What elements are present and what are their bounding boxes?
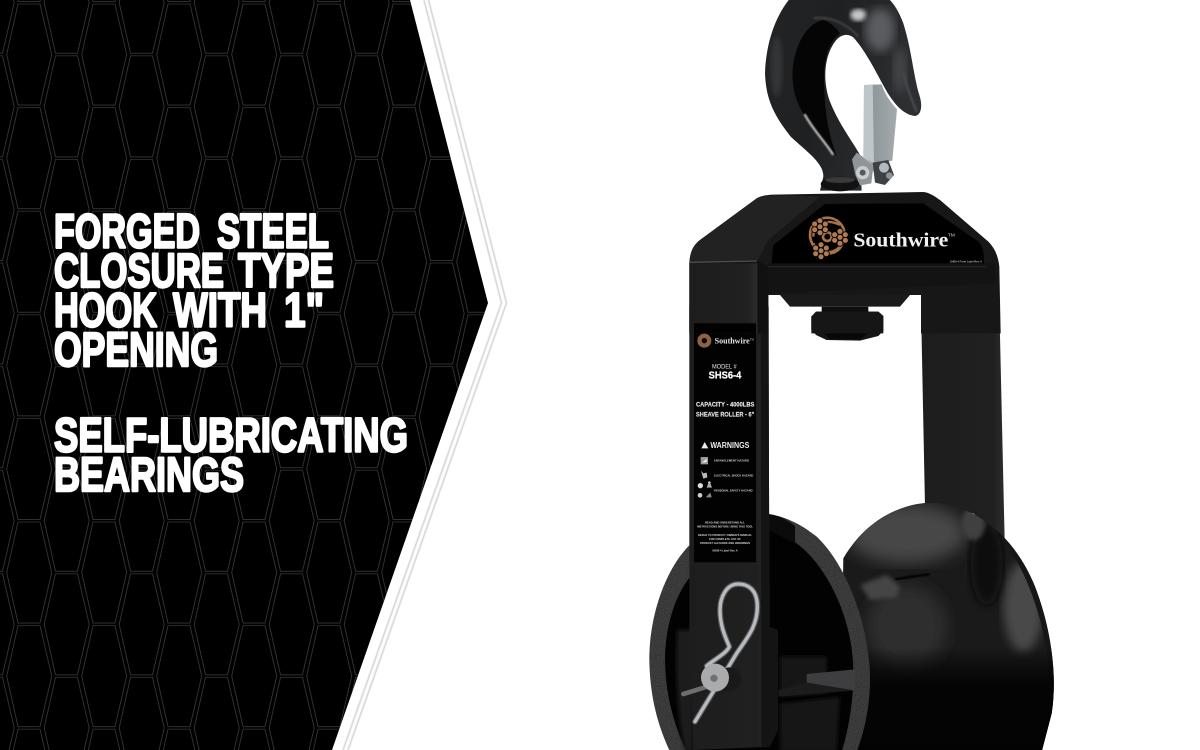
safety latch bbox=[863, 84, 897, 172]
label warnings: ENTANGLEMENT HAZARD bbox=[714, 459, 749, 463]
heading: product features: 1" bbox=[284, 284, 324, 338]
heading: product features: OPENING bbox=[54, 324, 218, 377]
copper logo bbox=[810, 218, 848, 260]
label logo: Southwire bbox=[715, 336, 750, 345]
yoke brand label bbox=[772, 203, 984, 263]
right flange and spool bbox=[837, 497, 1063, 750]
chevron outline stripes bbox=[343, 0, 506, 750]
heading: product features: BEARINGS bbox=[54, 449, 244, 502]
label instructions: REFER TO PRODUCT OWNER'S MANUAL bbox=[698, 533, 752, 537]
yoke brand label: TM bbox=[948, 233, 955, 238]
label warnings bbox=[698, 441, 753, 498]
heading: product features: CLOSURE bbox=[54, 245, 224, 298]
label specs: SHEAVE ROLLER - 6" bbox=[696, 413, 754, 419]
hook bbox=[765, 0, 921, 191]
left flange bbox=[649, 514, 870, 750]
yoke brand label: SHS6-4 Front Label Rev. A bbox=[950, 259, 983, 263]
front strap bbox=[689, 307, 770, 750]
label warnings: ELECTRICAL SHOCK HAZARD bbox=[714, 473, 753, 477]
label instructions: FOR COMPLETE LIST OF bbox=[709, 537, 741, 541]
panel: black chevron background bbox=[0, 0, 488, 750]
heading: product features bbox=[54, 206, 408, 502]
label model: SHS6-4 bbox=[709, 371, 742, 382]
hook and yoke bbox=[689, 0, 1001, 333]
heading: product features: FORGED bbox=[54, 206, 200, 258]
label warnings: WARNINGS bbox=[710, 441, 750, 450]
heading: product features: STEEL bbox=[217, 206, 329, 258]
label logo bbox=[697, 334, 754, 348]
label instructions: INSTRUCTIONS BEFORE USING THIS TOOL bbox=[697, 524, 753, 528]
label warnings: PERSONAL SAFETY HAZARD bbox=[714, 488, 753, 492]
side label bbox=[694, 323, 756, 562]
heading: product features: HOOK bbox=[54, 284, 157, 338]
label model bbox=[709, 364, 742, 382]
label specs bbox=[696, 403, 754, 419]
latch hardware bbox=[852, 153, 894, 185]
nut bbox=[811, 312, 883, 341]
heading: product features: TYPE bbox=[238, 245, 334, 298]
side label top edge bbox=[694, 323, 756, 333]
cross bar bbox=[807, 669, 855, 691]
label model: MODEL # bbox=[712, 364, 737, 370]
yoke bracket under plate bbox=[780, 295, 910, 333]
label logo: TM bbox=[750, 337, 754, 341]
label instructions bbox=[697, 520, 753, 553]
product photo: sheave roller with hook bbox=[649, 0, 1063, 750]
rear strap bbox=[921, 307, 1005, 540]
label instructions: SHS6-4 Label Rev. A bbox=[712, 549, 738, 553]
yoke brand label: Southwire bbox=[853, 230, 948, 252]
heading: product features: SELF-LUBRICATING bbox=[54, 410, 408, 462]
label instructions: PRODUCT HAZARDS AND WARNINGS bbox=[700, 541, 750, 545]
label specs: CAPACITY - 4000LBS bbox=[696, 403, 754, 409]
yoke top bbox=[689, 192, 1001, 333]
label instructions: READ AND UNDERSTAND ALL bbox=[705, 520, 745, 524]
cotter pin bbox=[683, 584, 757, 722]
heading: product features: WITH bbox=[173, 284, 267, 338]
sheave roller assembly bbox=[649, 307, 1063, 750]
